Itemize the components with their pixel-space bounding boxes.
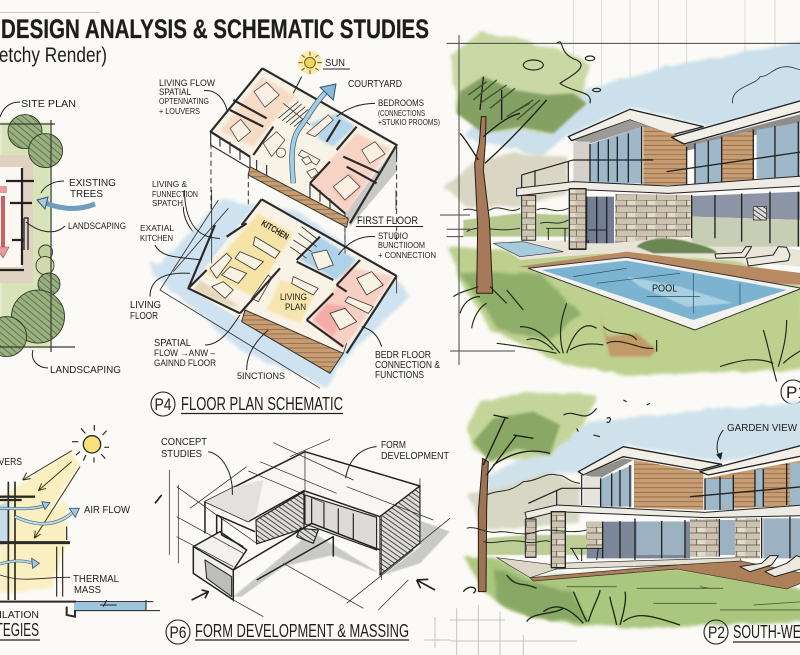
balcony slab bbox=[525, 505, 800, 519]
deck bbox=[530, 561, 800, 589]
panel: first floor isometric plan bbox=[183, 51, 397, 243]
side steps bbox=[497, 558, 557, 578]
label: bedroom floor: CONNECTION & bbox=[375, 360, 440, 371]
label: thermal mass bbox=[73, 574, 119, 596]
label: functions: 5INCTIONS bbox=[237, 371, 285, 381]
label: spatial flow bbox=[154, 338, 216, 368]
foreground ink leaves bbox=[453, 42, 800, 382]
tree bbox=[473, 400, 650, 592]
dashed projection lines bbox=[211, 143, 397, 243]
label: living and function: SPATCH bbox=[152, 198, 183, 208]
heading: P6 form development bbox=[166, 620, 409, 644]
blue wind arrow bbox=[37, 197, 95, 209]
pool label: POOL bbox=[652, 284, 678, 295]
blue landscape wash bbox=[148, 200, 410, 387]
floor plate bbox=[188, 198, 397, 373]
label: thermal mass: MASS bbox=[74, 585, 101, 596]
heading: P2 south-west bbox=[704, 620, 800, 644]
stone columns bbox=[522, 189, 586, 249]
labels: first floor bbox=[140, 58, 440, 243]
site plan building footprint bbox=[0, 155, 34, 283]
label: living plan: PLAN bbox=[285, 302, 306, 312]
cloud line bbox=[732, 67, 800, 103]
label: existing trees: EXISTING bbox=[69, 178, 116, 189]
label: form development bbox=[381, 440, 449, 462]
upper right wing bbox=[667, 100, 800, 185]
label: bedroom floor: BEDR FLOOR bbox=[375, 350, 431, 361]
label: studio: + CONNECTION bbox=[378, 250, 436, 260]
leaders bbox=[0, 102, 65, 368]
label: living and function: FUNNECTION bbox=[152, 189, 198, 199]
label: bedrooms: +STUKIO PROOMS) bbox=[378, 118, 440, 127]
label: spatial flow: FLOW →ANW – bbox=[154, 348, 215, 358]
label: living flow: LIVING FLOW bbox=[159, 78, 215, 88]
sun bbox=[298, 51, 322, 75]
heading: P4 floor plan schematic bbox=[151, 392, 343, 416]
window band bbox=[305, 495, 377, 550]
plant brown ink bbox=[603, 327, 657, 352]
label: concept studies: CONCEPT bbox=[161, 437, 207, 448]
label: site plan: SITE PLAN bbox=[21, 99, 76, 110]
shrubs bbox=[637, 239, 717, 253]
yellow light wash bbox=[0, 450, 80, 593]
stone columns bbox=[525, 512, 565, 568]
label: exatial kitchen: KITCHEN bbox=[140, 233, 173, 243]
hedge scribbles bbox=[463, 208, 568, 232]
water pool bbox=[67, 600, 160, 617]
leaders bbox=[208, 447, 377, 495]
roof plane bbox=[205, 452, 420, 522]
walls bbox=[188, 199, 397, 353]
labels: ground floor bbox=[130, 231, 440, 416]
lower walls bbox=[193, 502, 380, 600]
label: living floor: FLOOR bbox=[130, 311, 158, 322]
foreground plants bbox=[463, 575, 680, 625]
label: spatial flow: GAINND FLOOR bbox=[154, 358, 216, 368]
label: bedroom floor bbox=[375, 350, 440, 381]
side pool bbox=[493, 242, 563, 257]
structure bbox=[0, 482, 75, 617]
hedge bbox=[463, 213, 568, 237]
panel: P2 south-west perspective bbox=[450, 392, 800, 655]
ground floor glazing and stone bbox=[587, 517, 800, 560]
label: thermal mass: THERMAL bbox=[73, 574, 119, 585]
label: living and function bbox=[152, 179, 198, 208]
label: air flow: AIR FLOW bbox=[84, 505, 131, 516]
dark shrub wash bbox=[493, 568, 590, 622]
trees bbox=[0, 115, 65, 357]
right side face bbox=[345, 145, 397, 227]
label: exatial kitchen: EXATIAL bbox=[140, 223, 174, 233]
label: spatial flow: SPATIAL bbox=[154, 338, 191, 349]
label: bedrooms: BEDROOMS bbox=[378, 98, 424, 108]
construction lines bbox=[169, 439, 450, 617]
panel: P6 massing diagram bbox=[155, 439, 450, 617]
sketch grid bbox=[450, 605, 577, 655]
heading: P4 floor plan schematic: FLOOR PLAN SCHEMATIC bbox=[181, 394, 343, 414]
red circulation arrow bbox=[0, 186, 9, 258]
label: living and function: LIVING & bbox=[152, 179, 187, 189]
panel: P5 ventilation section bbox=[0, 425, 160, 617]
balcony slab bbox=[517, 176, 800, 196]
hatched faces bbox=[256, 486, 420, 575]
thermal mass leader bbox=[0, 575, 70, 579]
site plan boundary lines bbox=[0, 120, 75, 352]
label: studio: STUDIO bbox=[378, 231, 408, 241]
stairs bbox=[290, 227, 318, 258]
label: landscaping lower: LANDSCAPING bbox=[50, 365, 121, 376]
small sketch arrows bbox=[155, 495, 435, 600]
roof grey bbox=[205, 480, 263, 522]
label: bedrooms bbox=[378, 98, 440, 127]
blue air arrow bbox=[292, 84, 336, 183]
tree bbox=[457, 77, 587, 293]
sun ray arrows bbox=[23, 451, 80, 538]
air flow arrows bbox=[0, 502, 79, 568]
label: sun: SUN bbox=[325, 58, 345, 69]
label: form development: DEVELOPMENT bbox=[381, 451, 449, 462]
label: living flow: SPATIAL bbox=[159, 87, 191, 97]
wood deck bbox=[518, 252, 800, 285]
label: living floor bbox=[130, 300, 161, 322]
beds bbox=[230, 82, 385, 200]
terrace bbox=[557, 558, 742, 569]
plant brown bbox=[600, 317, 657, 357]
background tree wash bbox=[467, 472, 580, 528]
sky wash bbox=[487, 402, 800, 498]
lawn bbox=[448, 247, 800, 375]
balcony rail bbox=[528, 475, 600, 505]
heading: P2 south-west: P2 bbox=[708, 623, 725, 642]
stairs bbox=[278, 102, 312, 127]
upper right wing bbox=[690, 445, 800, 510]
sketch grid corner bbox=[424, 617, 450, 648]
lower wall edges bbox=[211, 132, 397, 227]
heading: P4 floor plan schematic: P4 bbox=[154, 395, 172, 414]
hedge bbox=[483, 535, 587, 555]
top rule bbox=[0, 12, 100, 14]
darker lawn shade bbox=[460, 273, 580, 340]
label: bedroom floor: FUNCTIONS bbox=[375, 370, 424, 381]
panel: P1 pool perspective bbox=[440, 0, 800, 382]
leaders bbox=[183, 77, 375, 238]
labels: massing bbox=[161, 437, 450, 648]
construction lines bbox=[160, 190, 397, 388]
furniture bbox=[210, 237, 383, 330]
frame lines bbox=[440, 35, 800, 365]
title: DESIGN ANALYSIS & SCHEMATIC STUDIES bbox=[1, 14, 429, 44]
patio furniture bbox=[546, 228, 790, 266]
label: trees: TREES bbox=[70, 189, 103, 200]
lawn strokes bbox=[567, 587, 800, 610]
lawn bbox=[463, 555, 800, 628]
label: living flow bbox=[159, 78, 215, 116]
heading: P6 form development: FORM DEVELOPMENT & MASSING bbox=[195, 621, 409, 641]
terrace bbox=[493, 238, 800, 267]
label: studio: BUNCTIIOOM bbox=[378, 240, 425, 250]
blue wash bbox=[0, 500, 10, 547]
site plan lawn bbox=[0, 122, 51, 348]
ground shadows bbox=[233, 480, 450, 597]
label: living plan bbox=[280, 292, 307, 312]
deck bbox=[242, 310, 343, 373]
deck bbox=[248, 167, 348, 227]
pool bbox=[528, 257, 800, 330]
label: studio bbox=[378, 231, 436, 260]
heading: P6 form development: P6 bbox=[170, 623, 186, 642]
garden view arrow bbox=[717, 430, 723, 459]
label: courtyard: COURTYARD bbox=[348, 79, 402, 90]
garage opening bbox=[205, 560, 232, 597]
foliage light wash bbox=[450, 32, 590, 133]
heading: strategies bbox=[0, 620, 40, 640]
label: garden view: GARDEN VIEW bbox=[727, 423, 798, 434]
upper left wing bbox=[568, 109, 703, 185]
label: landscaping: LANDSCAPING bbox=[68, 221, 126, 231]
label: first floor: FIRST FLOOR bbox=[357, 215, 418, 227]
label: form development: FORM bbox=[381, 440, 406, 451]
label: living floor: LIVING bbox=[130, 300, 161, 311]
heading: P1 bbox=[781, 380, 800, 404]
leaders bbox=[150, 190, 382, 370]
panel: ground floor isometric plan bbox=[148, 190, 410, 388]
background trees wash bbox=[443, 153, 567, 207]
kitchen label: KITCHEN bbox=[260, 218, 291, 242]
foliage wash bbox=[467, 392, 597, 462]
label: concept studies bbox=[161, 437, 207, 460]
patio furniture bbox=[570, 548, 800, 577]
drafting grid bbox=[573, 0, 775, 87]
label: living flow: OPTENNATING bbox=[159, 97, 209, 106]
ground floor wall and glazing bbox=[587, 192, 800, 247]
balcony rail bbox=[522, 160, 653, 188]
sun bbox=[72, 425, 109, 463]
labels: ventilation bbox=[0, 457, 131, 640]
label: living plan: LIVING bbox=[280, 292, 307, 302]
upper left wing bbox=[578, 447, 722, 510]
panel: site plan bbox=[0, 99, 126, 376]
walls bbox=[211, 68, 397, 223]
label: bedrooms: (CONNECTIONS bbox=[378, 108, 425, 118]
label: exatial kitchen bbox=[140, 223, 174, 243]
sky wash bbox=[463, 40, 800, 157]
ink hedge line bbox=[467, 474, 587, 543]
label: concept studies: STUDIES bbox=[161, 449, 202, 460]
label: living flow: + LOUVERS bbox=[159, 107, 200, 116]
room washes bbox=[220, 77, 390, 213]
room washes bbox=[193, 213, 393, 350]
floor plate bbox=[211, 68, 397, 227]
